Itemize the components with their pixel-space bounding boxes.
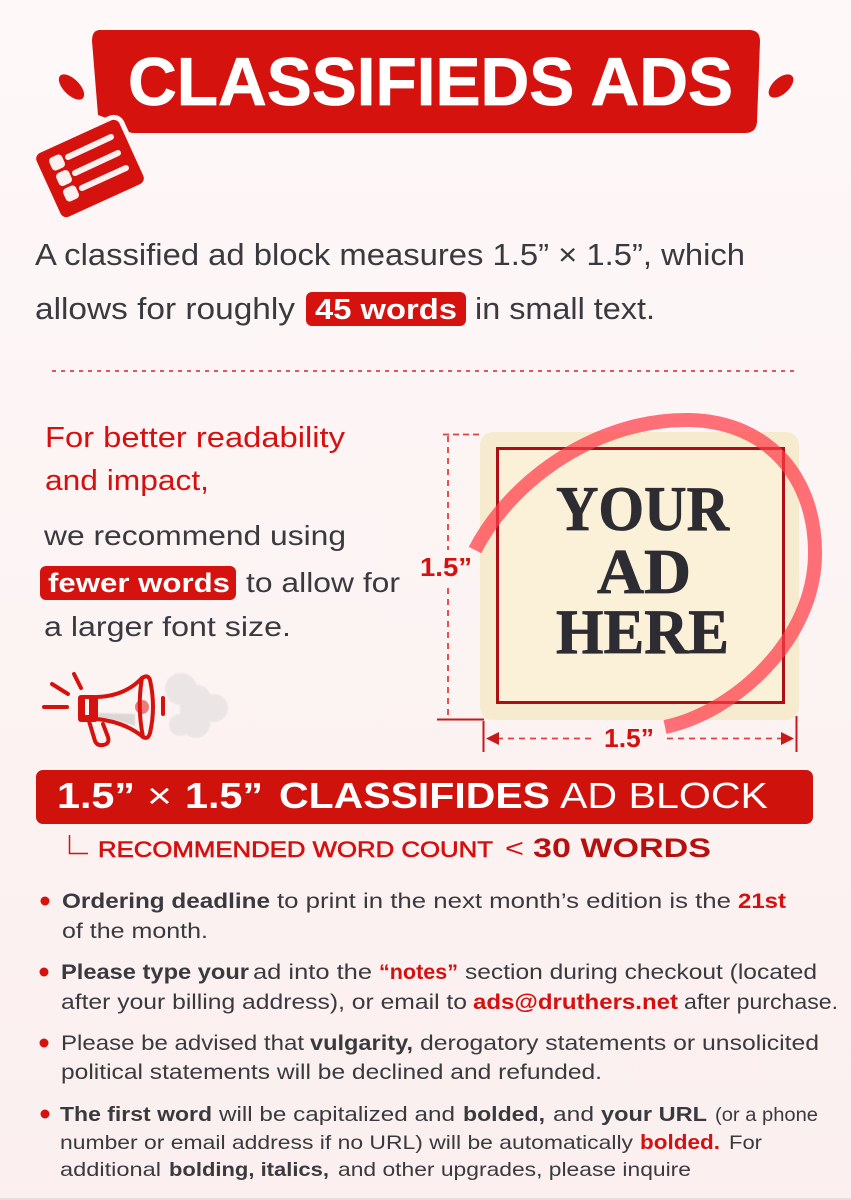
recommended word count: RECOMMENDED WORD COUNT xyxy=(98,837,493,862)
recommendation text block: a larger font size. xyxy=(44,611,291,642)
bullet: formatting rules: The first word xyxy=(60,1103,212,1126)
bullet: vulgarity policy: derogatory statements or unsolicited xyxy=(420,1031,819,1055)
ad block banner: AD BLOCK xyxy=(560,775,768,816)
ad block banner: 1.5” xyxy=(57,775,135,816)
ad block diagram xyxy=(420,420,815,753)
decorative red drops xyxy=(55,70,798,104)
recommendation text block: and impact, xyxy=(45,465,209,497)
bullet: formatting rules: For xyxy=(729,1132,763,1154)
bullet: vulgarity policy: vulgarity, xyxy=(310,1031,413,1055)
ad block banner: × xyxy=(147,775,172,816)
bullet: ordering deadline: of the month. xyxy=(62,919,208,943)
bullet: vulgarity policy: political statements will be declined and refunded. xyxy=(61,1060,602,1084)
bullet: formatting rules: bolding, italics, xyxy=(169,1159,329,1181)
ad block banner xyxy=(36,770,813,824)
bullet: formatting rules: bolded. xyxy=(640,1131,720,1154)
intro text block: in small text. xyxy=(475,291,655,326)
recommended word count xyxy=(70,833,711,863)
height dimension: 1.5” xyxy=(420,552,472,582)
bullet: notes section: after purchase. xyxy=(684,990,838,1014)
highlight: fewer words: fewer words xyxy=(48,568,230,598)
bullet: notes section: ad into the xyxy=(253,960,372,984)
bullet: formatting rules: additional xyxy=(60,1159,161,1181)
bullet: ordering deadline: 21st xyxy=(738,889,786,913)
ad block banner: CLASSIFIDES xyxy=(279,775,550,816)
bullet: formatting rules: bolded, xyxy=(463,1103,545,1126)
recommended word count: < xyxy=(505,833,524,863)
recommended word count: 30 WORDS xyxy=(533,833,711,863)
width dimension: 1.5” xyxy=(604,723,654,753)
bullet: notes section: “notes” xyxy=(379,960,458,984)
bullet: notes section xyxy=(40,960,838,1014)
recommendation text block: to allow for xyxy=(246,567,400,598)
bullet: formatting rules: number or email address if no URL) will be automatically xyxy=(60,1132,633,1154)
bullet: formatting rules: and xyxy=(553,1103,594,1126)
intro text block xyxy=(35,237,745,326)
bullet: notes section: ads@druthers.net xyxy=(473,990,678,1014)
recommendation text block: we recommend using xyxy=(43,520,346,551)
ad text xyxy=(556,474,730,667)
bullet: formatting rules: will be capitalized and xyxy=(218,1103,455,1126)
ad text: YOUR xyxy=(556,474,730,544)
red circle mark xyxy=(475,420,815,727)
ad paper xyxy=(480,432,799,720)
bullet: ordering deadline: Ordering deadline xyxy=(62,889,270,913)
bullet: formatting rules: (or a phone xyxy=(715,1105,818,1126)
ad block banner: 1.5” xyxy=(185,775,263,816)
width dimension xyxy=(484,716,796,753)
ad text: HERE xyxy=(556,597,729,667)
ad text: AD xyxy=(597,537,691,607)
bullet: notes section: section during checkout (located xyxy=(465,960,817,984)
icon: megaphone xyxy=(44,673,228,745)
bullet: notes section: Please type your xyxy=(61,960,250,984)
recommendation text block: For better readability xyxy=(45,422,346,454)
highlight: 45 words: 45 words xyxy=(315,294,457,326)
recommendation text block xyxy=(40,422,400,642)
bullet: vulgarity policy xyxy=(40,1031,819,1084)
icon: classified list card xyxy=(31,114,149,223)
title banner xyxy=(92,30,760,133)
bullet: formatting rules xyxy=(40,1103,818,1181)
bullet: vulgarity policy: Please be advised that xyxy=(61,1031,304,1055)
ad border box xyxy=(498,448,784,702)
intro text block: allows for roughly xyxy=(35,291,296,326)
bullet: ordering deadline: to print in the next month’s edition is the xyxy=(277,889,731,913)
title text: CLASSIFIEDS ADS xyxy=(128,44,733,120)
intro text block: A classified ad block measures 1.5” × 1.5”, which xyxy=(35,237,745,272)
bullet: ordering deadline xyxy=(40,889,786,943)
bullet: formatting rules: and other upgrades, please inquire xyxy=(338,1159,691,1181)
bullet: notes section: after your billing address), or email to xyxy=(61,990,467,1014)
bullet: formatting rules: your URL xyxy=(601,1103,707,1126)
